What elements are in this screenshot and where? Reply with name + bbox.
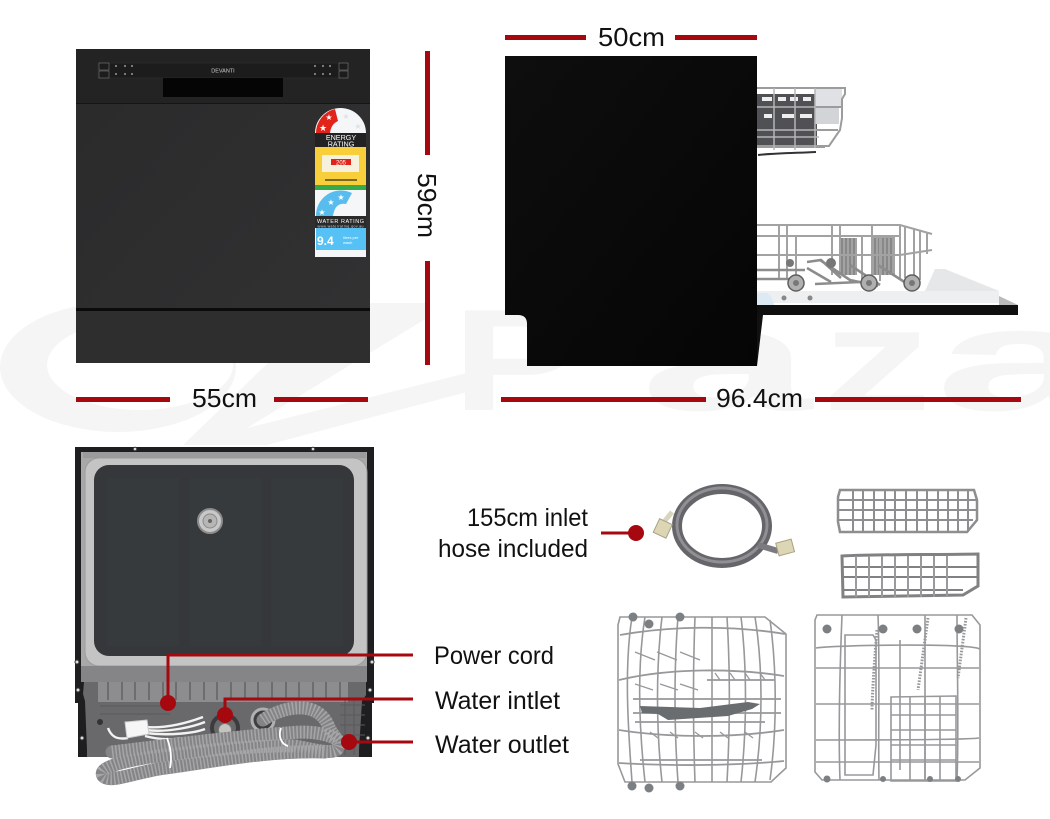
front view dishwasher: [76, 49, 370, 363]
energy and water rating label: ★: [325, 113, 333, 122]
callout: water inlet: Water intlet: [435, 687, 560, 715]
side panel: [505, 56, 757, 366]
energy and water rating label: ★: [342, 112, 350, 121]
dimension: 50cm width: [505, 22, 757, 52]
callout: water outlet: Water outlet: [435, 731, 569, 759]
inlet hose accessory: [653, 488, 795, 563]
energy and water rating label: ★: [337, 193, 345, 202]
callout: inlet hose: 155cm inlet: [467, 504, 588, 532]
watermark: OZ Plaza logo: z: [822, 278, 932, 442]
energy and water rating label: ★: [318, 208, 326, 217]
dimension: 55cm width: [76, 383, 368, 413]
watermark: OZ Plaza logo: P: [452, 279, 582, 441]
energy and water rating label: [315, 108, 366, 257]
dimension: 59cm height: 59cm: [412, 173, 442, 238]
energy and water rating label: www.waterrating.gov.au: [318, 224, 364, 228]
callout: inlet hose: hose included: [438, 535, 588, 563]
dimension: 59cm height: [412, 51, 442, 365]
energy and water rating label: RATING: [328, 140, 355, 148]
lower rack top view: [815, 615, 980, 782]
callout: power cord: [160, 642, 554, 711]
cutlery basket bottom: [842, 554, 978, 597]
energy and water rating label: WATER RATING: [317, 219, 364, 225]
drain hose: [102, 708, 339, 779]
power cord bundle: [108, 717, 205, 739]
cutlery basket top: [838, 489, 977, 532]
energy and water rating label: ★: [327, 198, 335, 207]
door inner frame: [85, 458, 367, 666]
watermark: OZ Plaza logo: a: [640, 278, 815, 442]
callout: water outlet: [341, 731, 569, 759]
upper rack top view: [618, 612, 786, 792]
base tray with ribs: [83, 682, 366, 757]
back view dishwasher: [75, 447, 374, 779]
energy and water rating label: ★: [354, 122, 362, 131]
spray arm mount: [198, 509, 222, 533]
dimension: 96.4cm depth: 96.4cm: [716, 383, 803, 413]
energy and water rating label: ★: [319, 123, 327, 133]
callout: inlet hose: [438, 504, 644, 563]
lower rack and door: [757, 225, 1018, 315]
watermark: OZ Plaza logo: [0, 278, 1050, 445]
upper rack: [757, 88, 845, 155]
energy and water rating label: litres per: [343, 235, 359, 240]
control panel: DEVANTI: [211, 68, 235, 74]
energy and water rating label: ENERGY: [326, 133, 356, 142]
inlet port: [212, 715, 238, 741]
control panel: [76, 49, 370, 103]
callout: water inlet: [217, 687, 560, 723]
energy and water rating label: wash: [343, 240, 352, 245]
energy and water rating label: 9.4: [317, 234, 334, 248]
dimension: 55cm width: 55cm: [192, 383, 257, 413]
dimension: 96.4cm depth: [501, 383, 1021, 413]
watermark: OZ Plaza logo: a: [935, 278, 1050, 442]
energy and water rating label: 205: [336, 160, 347, 166]
callout: power cord: Power cord: [434, 642, 554, 670]
dimension: 50cm width: 50cm: [598, 22, 665, 52]
side view dishwasher: [505, 56, 1018, 366]
